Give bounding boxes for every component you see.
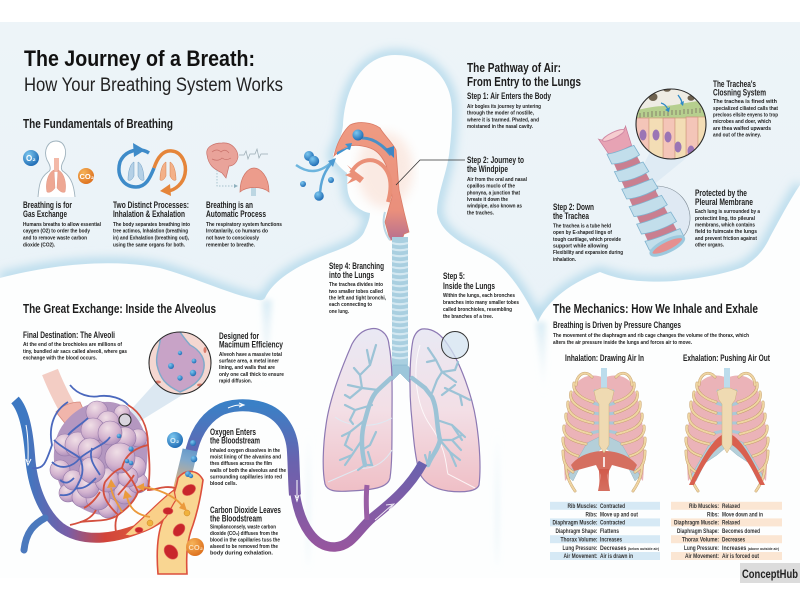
magnifier cone to cell view bbox=[640, 152, 690, 186]
right bronchial tree bbox=[412, 348, 470, 466]
text block: protected by the pleural membrane: Each lung is surrounded by a bbox=[695, 209, 761, 215]
pleural membrane arc bbox=[655, 186, 690, 240]
vessels: artery and capillary from the left bbox=[15, 400, 178, 550]
text block: step 1: moistaned in the nasal cavity. bbox=[467, 124, 533, 130]
text block: step 2 down the trachea: the Trachea bbox=[553, 211, 590, 221]
callout circle on the lung bbox=[442, 332, 468, 358]
text block: two distinct processes: in) and Exhalation (breathing out), bbox=[113, 235, 189, 241]
oxygen bubbles entering bbox=[117, 434, 134, 465]
magnified alveolus circle bbox=[149, 332, 211, 394]
text block: step 2 down the trachea: Flexibility and expansion during bbox=[553, 250, 623, 256]
text block: step 1: Air bogles its journey by untering bbox=[467, 104, 541, 110]
text block: step 2 journey to the windpipe bbox=[466, 155, 527, 216]
heading: the great exchange: The Great Exchange: Inside the Alveolus bbox=[23, 301, 216, 316]
table: exhalation: Thorax Volume: bbox=[682, 537, 719, 543]
table: inhalation: Flattens bbox=[600, 529, 620, 535]
text block: breathing is for gas exchange: dioxide (CO2). bbox=[23, 242, 55, 248]
text block: designed for maximum efficiency: Designed for bbox=[219, 331, 259, 341]
small magnifier circle on the alveolus bbox=[119, 414, 131, 426]
table: exhalation: Diaphragm Muscle: bbox=[674, 521, 719, 527]
text block: step 2 journey to the windpipe: lvreate it down the bbox=[467, 197, 509, 203]
title bbox=[24, 46, 283, 96]
text block: oxygen enters the bloodstream: Oxygen Enters bbox=[210, 427, 256, 437]
lungs bbox=[323, 329, 480, 492]
icon: gas exchange body with lungs: CO₂ bbox=[80, 172, 94, 181]
text block: step 2 down the trachea: support while allowing bbox=[553, 244, 608, 250]
text block: breathing is for gas exchange: Humans breaths to allow essential bbox=[23, 222, 101, 228]
text block: oxygen enters the bloodstream: blood cells. bbox=[210, 481, 237, 487]
text block: breathing is an automatic process: Breathing is an bbox=[206, 200, 253, 210]
text block: step 2 journey to the windpipe: Air from the oral and nasal bbox=[467, 177, 527, 183]
text block: carbon dioxide leaves the bloodstream: blood in the capillaries tuss the bbox=[210, 538, 281, 544]
icon: gas exchange body with lungs: O₂ bbox=[26, 154, 36, 163]
text block: step 5 inside the lungs: Inside the Lungs bbox=[443, 281, 495, 291]
table: inhalation bbox=[550, 502, 660, 560]
text block: step 4 branching bbox=[329, 261, 386, 315]
watermark: concepthub bbox=[740, 563, 800, 583]
text block: step 4 branching: each connecting to bbox=[329, 302, 372, 308]
text block: protected by the pleural membrane: protectint ling, tto pileural bbox=[695, 216, 755, 222]
text block: step 1: Step 1: Air Enters the Body bbox=[467, 91, 551, 101]
arm gaps: pale blue wedges bbox=[262, 300, 546, 570]
text block: final destination the alveoli: Final Destination: The Alveoli bbox=[23, 330, 115, 340]
table: inhalation: Ribs: bbox=[586, 512, 598, 518]
trachea: ringed airway in the body bbox=[380, 237, 420, 387]
text block: step 1 bbox=[466, 91, 551, 130]
text block: carbon dioxide leaves the bloodstream: dioxide (CO₂) diffuses from the bbox=[210, 531, 279, 537]
text block: step 2 down the trachea: open by E-shaped lings of bbox=[553, 230, 612, 236]
ribcage: inhalation bbox=[563, 368, 645, 491]
text block: step 5 inside the lungs: Within the lungs, each bronches bbox=[443, 293, 515, 299]
text block: breathing is an automatic process: Irrotanlarily, co humans do bbox=[206, 229, 268, 235]
text block: breathing is for gas exchange: and to remove waste carbon bbox=[23, 235, 87, 241]
gas exchange arrows bbox=[111, 487, 183, 517]
table: inhalation: Lung Pressure: bbox=[562, 546, 598, 552]
text block: the trachea's cleaning system: microbes and doer, which bbox=[713, 119, 771, 125]
text block: step 2 journey to the windpipe: the Windpipe bbox=[467, 164, 508, 174]
text block: protected by the pleural membrane: and prevent friction against bbox=[695, 236, 757, 242]
table: exhalation: Relaxed bbox=[722, 521, 740, 527]
text block: two distinct processes: Two Distinct Processes: bbox=[113, 200, 189, 210]
table: inhalation: Diaphragm Shape: bbox=[556, 529, 598, 535]
text block: oxygen enters the bloodstream: the Bloodstream bbox=[210, 436, 260, 446]
text block: two distinct processes: tree actimos, Inhalation (breathing bbox=[113, 229, 188, 235]
text block: step 5 inside the lungs bbox=[443, 271, 519, 320]
heading: inhalation: Inhalation: Drawing Air In bbox=[565, 353, 644, 363]
capillary mesh: blue side bbox=[32, 385, 128, 495]
callout line to step 2 bbox=[396, 160, 465, 185]
text block: step 2 journey to the windpipe: Step 2: Journey to bbox=[467, 155, 524, 165]
text block: step 2 journey to the windpipe: the traches. bbox=[467, 210, 494, 216]
text block: pressure changes: The movement of the diaphragm and rib cage changes the volume of the thorax, which bbox=[553, 333, 749, 339]
text block: step 4 branching: one lung. bbox=[329, 309, 349, 315]
text block: designed for maximum efficiency bbox=[219, 331, 285, 384]
text block: designed for maximum efficiency: Macimum Efficiency bbox=[219, 340, 283, 350]
text block: carbon dioxide leaves the bloodstream bbox=[210, 505, 281, 556]
text block: designed for maximum efficiency: rapid diffusion. bbox=[219, 378, 252, 384]
text block: step 5 inside the lungs: called bronchioles, resembling bbox=[443, 307, 512, 313]
text block: protected by the pleural membrane: Protected by the bbox=[695, 188, 747, 198]
capillary mesh: red side bbox=[70, 405, 175, 532]
text block: pathway of air heading: The Pathway of Air: bbox=[467, 60, 561, 75]
table: exhalation: Lung Pressure: bbox=[684, 546, 719, 552]
alveolar cluster bbox=[50, 401, 148, 518]
text block: final destination the alveoli: tiny, bundled air sacs called alveoli, where gas bbox=[23, 349, 127, 355]
text block: breathing is for gas exchange: Gas Exchange bbox=[23, 209, 67, 219]
top white margin bbox=[0, 0, 800, 22]
text block: oxygen enters the bloodstream bbox=[209, 427, 287, 487]
magnified cell view: ciliated cells bbox=[635, 88, 707, 160]
text block: the trachea's cleaning system: The Trachea's bbox=[713, 79, 756, 89]
ribcage: exhalation bbox=[686, 368, 768, 491]
text block: carbon dioxide leaves the bloodstream: alseed to be removed from the bbox=[210, 544, 279, 550]
text block: pressure changes: Breathing is Driven by Pressure Changes bbox=[553, 320, 681, 330]
heading: the fundamentals of breathing: The Fundamentals of Breathing bbox=[23, 116, 173, 131]
text block: two distinct processes: Inhalation & Exhalation bbox=[113, 209, 185, 219]
table: exhalation: Move down and in bbox=[722, 512, 763, 518]
text block: step 4 branching: into the Lungs bbox=[329, 270, 374, 280]
text block: breathing is an automatic process bbox=[206, 200, 282, 248]
text block: step 1: through the moder of nostille, bbox=[467, 111, 534, 117]
text block: step 2 down the trachea bbox=[553, 202, 623, 263]
airflow into the nose with oxygen molecules bbox=[296, 151, 336, 201]
text block: breathing is an automatic process: remember to breathe. bbox=[206, 242, 255, 248]
text block: step 1: where it is trarmed. Phated, and bbox=[466, 117, 539, 123]
text block: oxygen enters the bloodstream: moist lining of the alvanins and bbox=[210, 455, 281, 461]
icon: O2 badge: O₂ bbox=[170, 436, 179, 445]
table: exhalation: Diaphragm Shape: bbox=[677, 529, 719, 535]
text block: breathing is an automatic process: The respiratory system functions bbox=[206, 222, 282, 228]
left lung bbox=[323, 329, 392, 491]
text block: pathway of air heading: From Entry to the Lungs bbox=[467, 74, 581, 89]
right lung bbox=[410, 329, 480, 492]
table: exhalation: Increases (above outside air) bbox=[722, 546, 780, 552]
table: inhalation: Diaphragm Muscle: bbox=[552, 521, 598, 527]
blood vessel from alveolus to lungs bbox=[180, 403, 423, 547]
magnifier cone to alveolus bbox=[127, 381, 205, 426]
text block: protected by the pleural membrane: membrans, which contains bbox=[695, 222, 755, 228]
text block: the trachea's cleaning system: and out of the aviney. bbox=[713, 132, 761, 138]
text block: oxygen enters the bloodstream: Inhaled oxygen dissolves in the bbox=[210, 448, 281, 454]
table: inhalation: Thorax Volume: bbox=[560, 537, 598, 543]
text block: the trachea's cleaning system: are thea walfed upwards bbox=[713, 126, 771, 132]
table: exhalation bbox=[671, 502, 782, 560]
text block: step 5 inside the lungs: Step 5: bbox=[443, 271, 465, 281]
text block: pressure changes bbox=[553, 320, 749, 346]
text block: pressure changes: alters the air pressure inside the lungs and forces air to move. bbox=[553, 340, 692, 346]
text block: step 2 journey to the windpipe: phonyna, a junction that bbox=[467, 190, 520, 196]
upper airway: nose, mouth and pharynx bbox=[334, 123, 413, 240]
text block: step 5 inside the lungs: branches into many smaller tobes bbox=[443, 300, 519, 306]
text block: breathing is for gas exchange bbox=[23, 200, 101, 248]
text block: two distinct processes: The body separates breathing into bbox=[113, 222, 190, 228]
text block: two distinct processes bbox=[113, 200, 190, 248]
table: inhalation: Air Movement: bbox=[564, 554, 598, 560]
table: inhalation: Decreases (below outside air) bbox=[600, 546, 660, 552]
text block: step 2 journey to the windpipe: windpipe, also known as bbox=[466, 204, 522, 210]
text block: step 2 down the trachea: inhalation. bbox=[553, 257, 576, 263]
table: exhalation: Relaxed bbox=[722, 504, 740, 510]
text block: carbon dioxide leaves the bloodstream: the Bloodstream bbox=[210, 514, 262, 524]
text block: protected by the pleural membrane: Pleural Membrane bbox=[695, 197, 753, 207]
table: inhalation: Contracted bbox=[600, 521, 625, 527]
text block: step 2 down the trachea: Step 2: Down bbox=[553, 202, 594, 212]
text block: designed for maximum efficiency: Alveoh have a massive total bbox=[219, 352, 282, 358]
title: The Journey of a Breath: bbox=[24, 46, 255, 71]
title: How Your Breathing System Works bbox=[24, 75, 283, 96]
table: inhalation: Increases bbox=[600, 537, 623, 543]
text block: the trachea's cleaning system: precloos ellsite enyens to trop bbox=[713, 112, 778, 118]
table: exhalation: Rib Muscles: bbox=[689, 504, 719, 510]
text block: designed for maximum efficiency: lining, and walls that are bbox=[219, 365, 276, 371]
text block: protected by the pleural membrane: field to fuimcate the lungs bbox=[695, 229, 757, 235]
text block: breathing is an automatic process: Automatic Process bbox=[206, 209, 266, 219]
text block: the trachea's cleaning system: The trachea is fined with bbox=[713, 99, 777, 105]
text block: the trachea's cleaning system: Closning System bbox=[713, 88, 766, 98]
table: inhalation: Rib Muscles: bbox=[568, 504, 598, 510]
bloodstream vessel with red cells bbox=[124, 471, 203, 574]
icon: CO2 badge: CO₂ bbox=[188, 543, 203, 552]
text block: protected by the pleural membrane bbox=[695, 188, 761, 248]
oxygen molecules in vessel bbox=[185, 440, 197, 478]
text block: the trachea's cleaning system bbox=[713, 79, 778, 138]
text block: carbon dioxide leaves the bloodstream: body during exhalation. bbox=[210, 550, 273, 556]
table: inhalation: Air is drawn in bbox=[600, 554, 633, 560]
text block: carbon dioxide leaves the bloodstream: Carbon Dioxide Leaves bbox=[210, 505, 281, 515]
text block: oxygen enters the bloodstream: thes diffuses across the film bbox=[210, 461, 272, 467]
table: inhalation: Move up and out bbox=[600, 512, 638, 518]
left bronchial tree bbox=[340, 345, 391, 470]
table: exhalation: Becomes domed bbox=[722, 529, 760, 535]
text block: oxygen enters the bloodstream: walls of both the alveolus and the bbox=[209, 468, 287, 474]
table: exhalation: Air Movement: bbox=[685, 554, 719, 560]
text block: oxygen enters the bloodstream: surrounding capillaries into red bbox=[210, 474, 282, 480]
table: exhalation: Air is forced out bbox=[722, 554, 759, 560]
text block: breathing is for gas exchange: Breathing is for bbox=[23, 200, 72, 210]
icon: brain and diaphragm bbox=[207, 143, 269, 196]
text block: carbon dioxide leaves the bloodstream: Simplianconsely, waste carbon bbox=[210, 524, 276, 530]
text block: protected by the pleural membrane: other organs. bbox=[695, 242, 724, 248]
text block: final destination the alveoli: exchange with the blood occurs. bbox=[23, 356, 97, 362]
text block: breathing is an automatic process: not have to consciously bbox=[206, 235, 260, 241]
table: exhalation: Ribs: bbox=[707, 512, 719, 518]
table: exhalation: Decreases bbox=[722, 537, 746, 543]
text block: step 2 down the trachea: tough cartilage, which provide bbox=[553, 237, 622, 243]
text block: final destination the alveoli: At the end of the brochioles are millions of bbox=[23, 342, 122, 348]
bottom white margin bbox=[0, 578, 800, 600]
heading: exhalation: Exhalation: Pushing Air Out bbox=[683, 353, 770, 363]
text block: step 4 branching: The trachea divides into bbox=[329, 282, 383, 288]
icon: two process loops with lungs bbox=[119, 143, 185, 196]
text block: step 2 journey to the windpipe: cpaillos muclo of the bbox=[467, 184, 516, 190]
text block: step 4 branching: two smaller tobes called bbox=[329, 289, 383, 295]
bronchiole tube bbox=[50, 372, 90, 432]
text block: designed for maximum efficiency: surface area, a metal inner bbox=[219, 358, 280, 364]
icon: CO2 badge bbox=[186, 538, 204, 556]
large trachea illustration bbox=[596, 124, 687, 259]
table: inhalation: Contracted bbox=[600, 504, 625, 510]
icon: gas exchange body with lungs bbox=[23, 141, 94, 197]
text block: breathing is for gas exchange: caygen (O2) to order the body bbox=[23, 229, 91, 235]
icon: O2 badge bbox=[167, 432, 183, 448]
text block: two distinct processes: using the same organs for both. bbox=[113, 242, 185, 248]
text block: step 4 branching: Step 4: Branching bbox=[329, 261, 384, 271]
text block: the trachea's cleaning system: specialized ciliated calls that bbox=[713, 106, 778, 112]
text block: step 5 inside the lungs: the branches of a tree. bbox=[443, 314, 493, 320]
text block: final destination the alveoli bbox=[23, 330, 127, 362]
text block: designed for maximum efficiency: only one call thick to ensure bbox=[219, 372, 285, 378]
text block: pathway of air heading bbox=[467, 60, 581, 89]
text block: step 4 branching: the left and tight bronchi, bbox=[329, 296, 386, 302]
text block: step 2 down the trachea: The trachea is a tube held bbox=[553, 224, 611, 230]
